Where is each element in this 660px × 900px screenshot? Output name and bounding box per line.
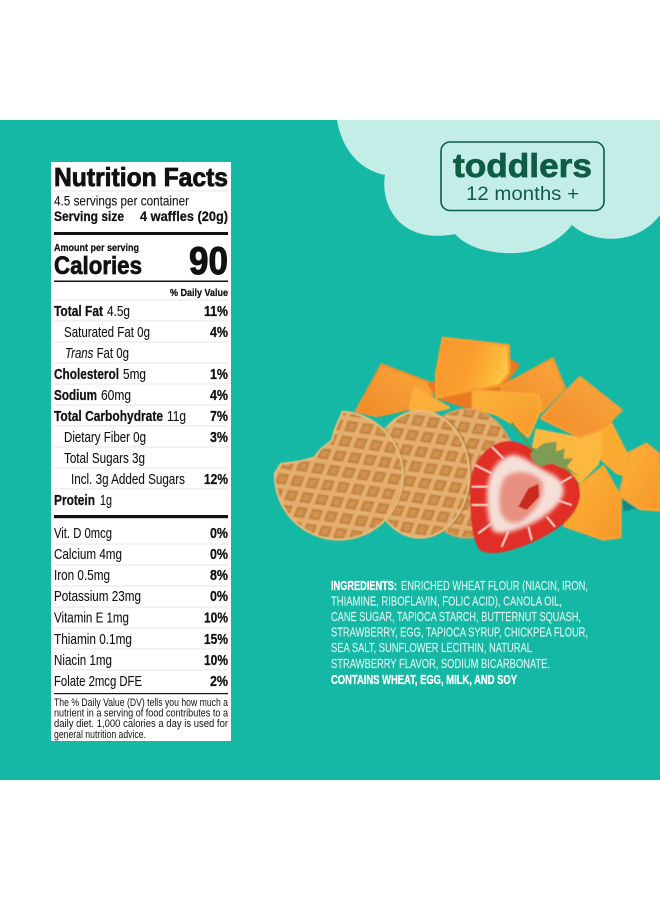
nutrient rows: Total Sugars 3g xyxy=(64,451,145,467)
calories block: Amount per serving xyxy=(54,242,139,254)
daily value heading: % Daily Value xyxy=(170,287,228,299)
ingredients text: THIAMINE, RIBOFLAVIN, FOLIC ACID), CANOLA OIL, xyxy=(331,594,562,608)
vitamin and mineral rows: Calcium 4mg xyxy=(54,547,122,563)
teal background band xyxy=(0,120,660,780)
vitamin and mineral rows: 10% xyxy=(204,653,228,669)
waffle bitten xyxy=(275,412,405,540)
nutrient rows: Incl. 3g Added Sugars xyxy=(71,472,185,488)
waffle middle xyxy=(371,411,472,538)
badge: toddlers 12 months +: toddlers xyxy=(453,148,592,185)
ingredients text: CONTAINS WHEAT, EGG, MILK, AND SOY xyxy=(331,672,517,687)
vitamin and mineral rows: Vitamin E 1mg xyxy=(54,610,129,626)
nutrient rows: 1g xyxy=(100,493,112,509)
nutrient rows: 4.5g xyxy=(107,304,130,320)
ingredients text: ENRICHED WHEAT FLOUR (NIACIN, IRON, xyxy=(401,578,588,593)
footnote: nutrient in a serving of food contributes to a xyxy=(54,708,229,720)
nutrient rows: Cholesterol xyxy=(54,367,119,383)
footnote: daily diet. 1,000 calories a day is used for xyxy=(54,718,228,730)
vitamin and mineral rows: Thiamin 0.1mg xyxy=(54,632,132,648)
badge: toddlers 12 months + xyxy=(441,142,604,210)
strawberry half xyxy=(470,423,580,553)
ingredients text: SEA SALT, SUNFLOWER LECITHIN, NATURAL xyxy=(331,640,532,655)
vitamin and mineral rows: Iron 0.5mg xyxy=(54,568,110,584)
nutrient rows: 11% xyxy=(204,304,228,320)
vitamin and mineral rows: 0% xyxy=(210,547,228,563)
ingredients text: INGREDIENTS: xyxy=(331,578,397,593)
nutrient rows: 60mg xyxy=(101,388,131,404)
nutrient rows: 7% xyxy=(210,409,228,425)
badge: toddlers 12 months +: 12 months + xyxy=(466,183,579,205)
vitamin and mineral rows: 10% xyxy=(204,610,228,626)
vitamin and mineral rows: 8% xyxy=(210,568,228,584)
servings info xyxy=(54,192,228,224)
footnote: The % Daily Value (DV) tells you how much a xyxy=(54,697,229,709)
squash cubes xyxy=(356,338,659,539)
vitamin and mineral rows: 0% xyxy=(210,526,228,542)
footnote: general nutrition advice. xyxy=(54,729,146,741)
waffle right xyxy=(417,409,517,538)
nutrient rows: Total Carbohydrate xyxy=(54,409,163,425)
servings info: 4.5 servings per container xyxy=(54,192,189,208)
food illustration: squash, waffles, strawberry xyxy=(275,338,659,553)
calories block xyxy=(54,240,228,283)
vitamin and mineral rows: 0% xyxy=(210,589,228,605)
nutrient rows xyxy=(54,304,228,509)
nutrient rows: 3% xyxy=(210,430,228,446)
nutrient rows: Trans Fat 0g xyxy=(65,346,129,362)
nutrient rows: 4% xyxy=(210,325,228,341)
vitamin and mineral rows: 2% xyxy=(210,674,228,690)
servings info: 4 waffles (20g) xyxy=(140,209,228,224)
nutrient rows: Sodium xyxy=(54,388,97,404)
nutrition facts heading: Nutrition Facts xyxy=(54,162,228,192)
vitamin and mineral rows: Potassium 23mg xyxy=(54,589,141,605)
vitamin and mineral rows: 15% xyxy=(204,632,228,648)
servings info: Serving size xyxy=(54,209,124,224)
calories block: 90 xyxy=(189,240,228,283)
nutrient rows: 12% xyxy=(204,472,228,488)
nutrient rows: 1% xyxy=(210,367,228,383)
vitamin and mineral rows: Folate 2mcg DFE xyxy=(54,674,142,690)
footnote xyxy=(54,697,229,741)
nutrient rows: 5mg xyxy=(123,367,146,383)
nutrient rows: Saturated Fat 0g xyxy=(64,325,150,341)
nutrition facts panel xyxy=(51,162,231,741)
nutrient rows: Dietary Fiber 0g xyxy=(64,430,146,446)
cloud shape xyxy=(337,120,660,253)
nutrient rows: 11g xyxy=(167,409,186,425)
ingredients text: STRAWBERRY FLAVOR, SODIUM BICARBONATE. xyxy=(331,656,550,671)
vitamin and mineral rows xyxy=(54,526,228,690)
ingredients text xyxy=(331,578,588,687)
nutrient rows: Protein xyxy=(54,493,95,509)
calories block: Calories xyxy=(54,252,142,280)
vitamin and mineral rows: Niacin 1mg xyxy=(54,653,112,669)
vitamin and mineral rows: Vit. D 0mcg xyxy=(54,526,112,542)
nutrient rows: 4% xyxy=(210,388,228,404)
nutrient rows: Total Fat xyxy=(54,304,103,320)
